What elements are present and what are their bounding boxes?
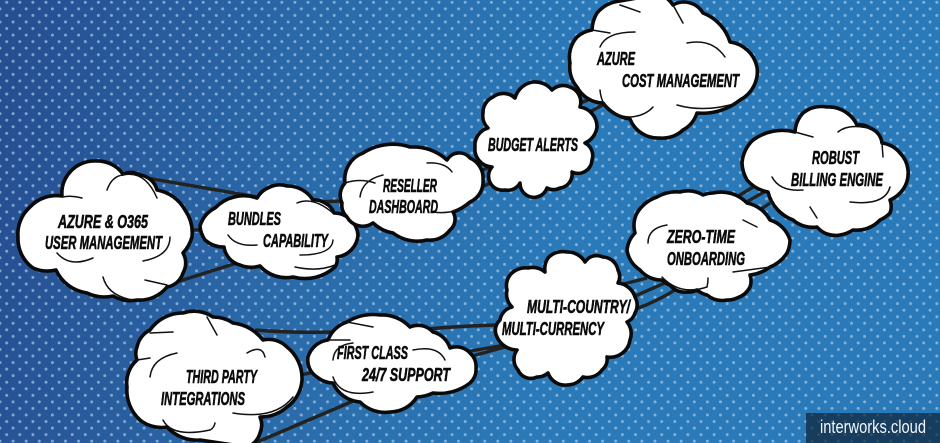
label: ROBUST xyxy=(812,148,860,168)
label: AZURE xyxy=(596,49,636,69)
label: BILLING ENGINE xyxy=(791,170,884,190)
cloud: Zero-time onboarding xyxy=(627,191,790,300)
label: AZURE & O365 xyxy=(57,212,149,232)
cloud: Budget alerts xyxy=(475,82,597,197)
label: INTEGRATIONS xyxy=(161,389,245,409)
label: ONBOARDING xyxy=(667,249,745,269)
label: BUNDLES xyxy=(228,209,281,229)
cloud: First class 24/7 support xyxy=(308,315,476,412)
cloud: Bundles capability xyxy=(200,185,358,279)
cloud: Third party integrations xyxy=(127,311,302,443)
cloud: Multi-country / multi-currency xyxy=(495,252,637,385)
label: BUDGET ALERTS xyxy=(488,135,578,155)
label: COST MANAGEMENT xyxy=(622,71,740,91)
connector lines between clouds xyxy=(147,84,770,443)
cloud: Reseller dashboard xyxy=(340,144,483,241)
label: CAPABILITY xyxy=(263,231,329,251)
website badge xyxy=(806,413,940,443)
label: FIRST CLASS xyxy=(337,343,408,363)
label: 24/7 SUPPORT xyxy=(361,365,451,385)
label: USER MANAGEMENT xyxy=(45,233,163,253)
cloud: Azure & O365 user management xyxy=(18,161,192,301)
label: MULTI-COUNTRY/ xyxy=(527,297,631,317)
label: THIRD PARTY xyxy=(186,367,258,387)
label: RESELLER xyxy=(383,176,437,196)
label: MULTI-CURRENCY xyxy=(502,319,605,339)
label: DASHBOARD xyxy=(369,197,438,217)
cloud: Robust billing engine xyxy=(742,107,908,235)
label: ZERO-TIME xyxy=(666,227,736,247)
cloud: Azure cost management xyxy=(569,0,757,138)
